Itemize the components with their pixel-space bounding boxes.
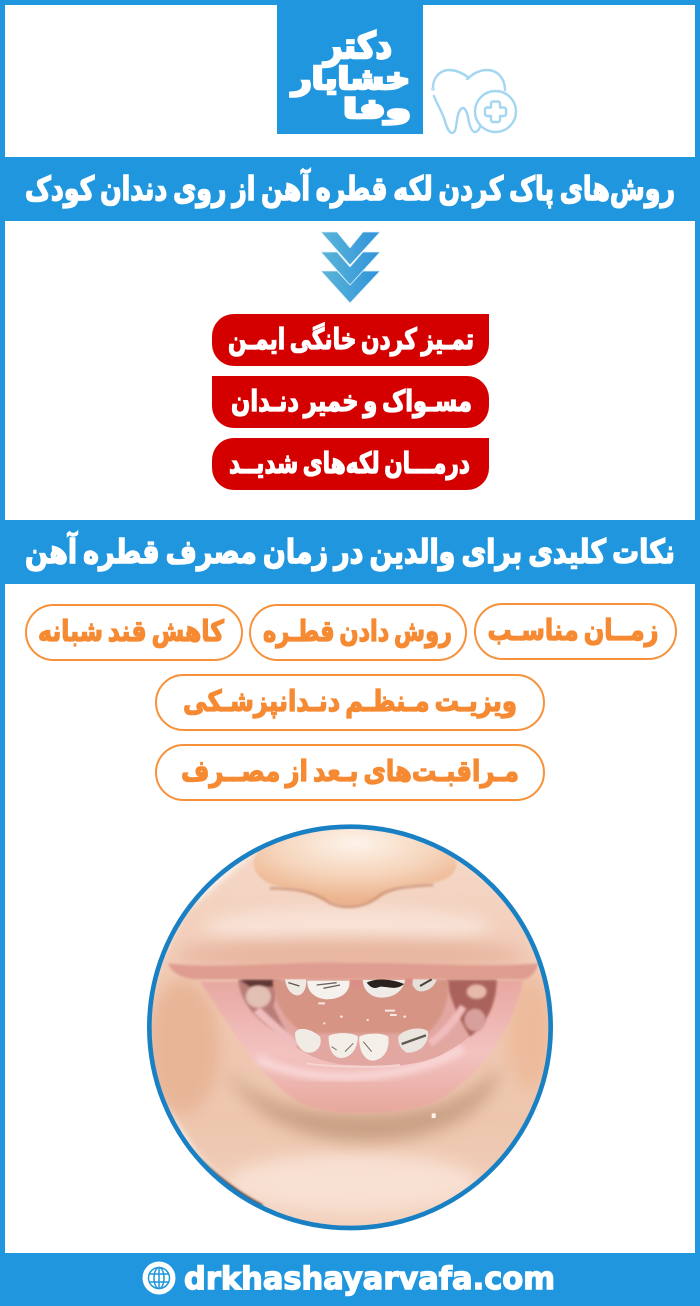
upper teeth	[285, 979, 306, 995]
pill: reduce night sugar	[26, 605, 242, 660]
logo block	[277, 0, 423, 134]
button: severe stain treatment: درمـــان لکه‌های شدیــد	[229, 446, 470, 480]
button: safe home cleaning	[212, 314, 489, 366]
photo: child's mouth with stained teeth	[140, 820, 560, 1240]
lower teeth	[295, 1029, 321, 1053]
logo block: دکتر	[322, 26, 392, 67]
cheeks	[147, 980, 220, 1113]
pill: right time: زمــان مناسـب	[488, 613, 658, 647]
pill: post-use care: مـراقبـت‌های بـعد از مصــرف	[181, 754, 519, 788]
pill: reduce night sugar: کاهش قند شبانه	[38, 614, 224, 648]
chin shadow	[223, 1067, 500, 1142]
heading band: cleaning methods	[0, 157, 700, 221]
logo block: وفا	[343, 94, 411, 125]
nose	[253, 827, 457, 907]
gum and back teeth	[246, 985, 271, 1008]
dark hair strip	[194, 1150, 264, 1206]
upper lip	[168, 963, 538, 979]
heading band: key tips for parents	[0, 520, 700, 584]
logo block: خشایار	[290, 62, 410, 97]
pill: how to give drops: روش دادن قطـره	[263, 614, 452, 648]
pill: right time	[475, 604, 676, 659]
icon: globe	[142, 1262, 176, 1294]
pill: post-use care	[156, 745, 544, 800]
pill: regular dental visits: ویزیـت مـنظـم دنـدانپزشـکی	[183, 684, 517, 719]
lower lip	[200, 980, 523, 1113]
mouth opening	[238, 980, 471, 1066]
lower chin light	[227, 1153, 480, 1213]
circular frame	[149, 827, 551, 1228]
button: safe home cleaning: تمـیز کردن خانگی ایمـن	[228, 322, 474, 356]
button: toothbrush and toothpaste	[212, 376, 489, 428]
upper lip shade	[177, 938, 523, 972]
pill: regular dental visits	[156, 675, 544, 730]
lower tooth stains	[402, 1035, 426, 1044]
tongue	[273, 980, 448, 1033]
icon: tooth with plus	[432, 70, 516, 133]
button: severe stain treatment	[212, 438, 489, 490]
saliva specks	[318, 1003, 406, 1023]
button: toothbrush and toothpaste: مسـواک و خمیر دنـدان	[231, 384, 472, 418]
arrow: triple chevron	[321, 232, 380, 303]
skin	[140, 853, 560, 1240]
pill: how to give drops	[250, 605, 466, 660]
upper tooth stains	[367, 979, 404, 988]
footer band with website	[0, 1253, 700, 1306]
upper lip skin highlight	[206, 904, 488, 941]
footer band with website: drkhashayarvafa.com	[184, 1261, 555, 1297]
